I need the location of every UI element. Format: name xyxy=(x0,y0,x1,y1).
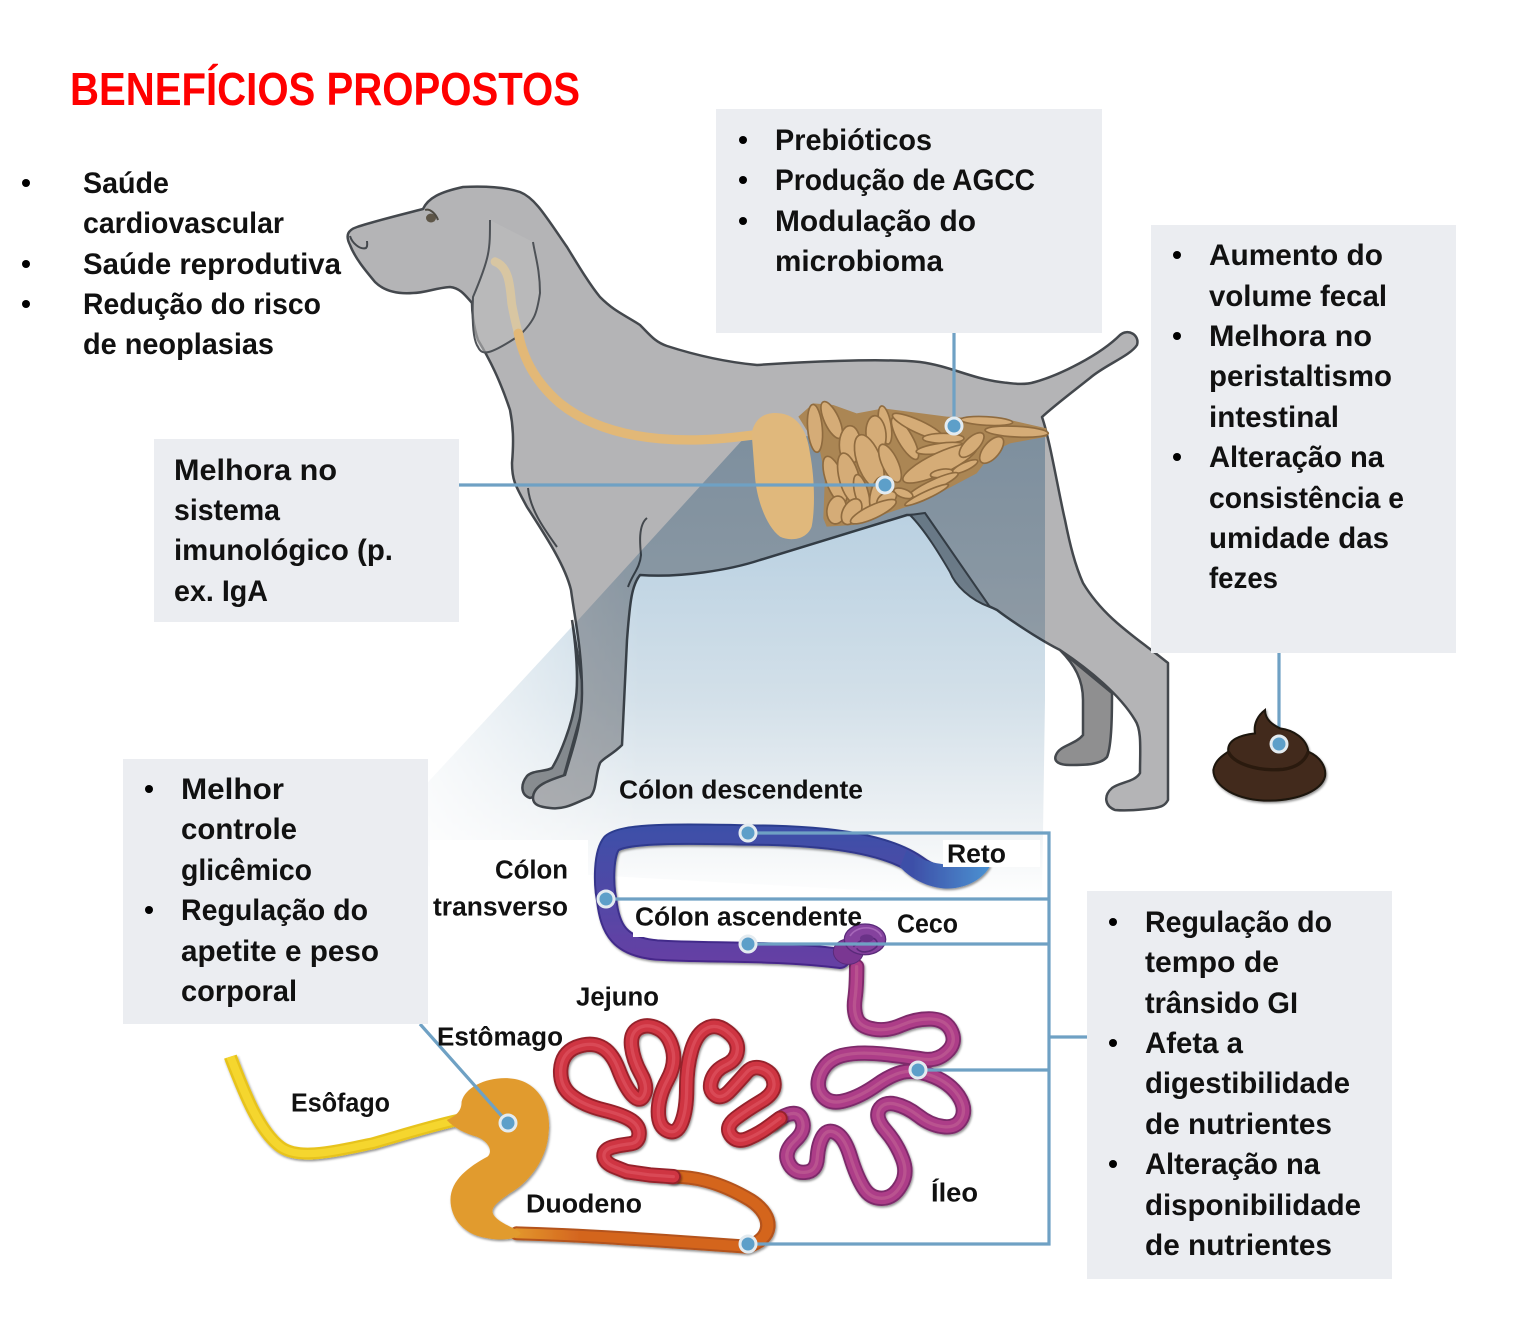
panel: immune system: ex. IgA xyxy=(174,575,268,608)
panel: GI transit: tempo de xyxy=(1145,946,1279,979)
anatomy labels: Ceco xyxy=(897,910,958,938)
panel: fecal effects: Melhora no xyxy=(1209,320,1372,353)
far hind leg xyxy=(1055,650,1112,765)
anatomy labels: Estômago xyxy=(437,1024,563,1052)
panel: GI transit: Regulação do xyxy=(1145,906,1332,939)
nose and mouth xyxy=(350,236,367,248)
panel: GI transit xyxy=(1087,891,1392,1279)
inner flank xyxy=(910,513,990,607)
text block: systemic benefits: Redução do risco xyxy=(83,288,321,321)
panel: glycemic control: controle xyxy=(181,813,297,846)
ear xyxy=(473,220,540,352)
esophagus in dog xyxy=(495,262,753,440)
panel: glycemic control: glicêmico xyxy=(181,854,312,887)
ileum xyxy=(773,967,963,1198)
anatomy labels: Duodeno xyxy=(526,1190,642,1218)
panel: prebiotics: microbioma xyxy=(775,245,944,278)
panel: prebiotics: Prebióticos xyxy=(775,124,932,157)
panel: fecal effects: peristaltismo xyxy=(1209,360,1392,393)
panel: fecal effects: intestinal xyxy=(1209,401,1339,434)
far front leg xyxy=(522,620,585,798)
stomach xyxy=(447,1078,549,1240)
gut mass xyxy=(798,399,1049,528)
cecum xyxy=(833,924,886,964)
panel: prebiotics: Produção de AGCC xyxy=(775,164,1035,197)
panel: glycemic control: Regulação do xyxy=(181,894,368,927)
panel: immune system: Melhora no xyxy=(174,454,337,487)
panel: fecal effects: consistência e xyxy=(1209,482,1404,515)
anatomy labels: Reto xyxy=(947,840,1006,868)
panel: fecal effects: umidade das xyxy=(1209,522,1389,555)
anatomy labels: Jejuno xyxy=(576,984,659,1012)
panel: fecal effects: Alteração na xyxy=(1209,441,1385,474)
anatomy labels: Cólon descendente xyxy=(619,776,863,804)
panel: GI transit: disponibilidade xyxy=(1145,1189,1361,1222)
panel: immune system: sistema xyxy=(174,494,281,527)
esophagus xyxy=(230,1057,458,1154)
illustration: dog xyxy=(348,187,1168,810)
anatomy labels: Cólon ascendente xyxy=(635,904,862,932)
colon xyxy=(605,834,991,958)
duodenum xyxy=(517,1177,768,1247)
shaded highlight panel xyxy=(442,436,1045,864)
panel: glycemic control: Melhor xyxy=(181,773,285,806)
connector lines xyxy=(420,333,1279,1244)
text block: systemic benefits: Saúde xyxy=(83,167,169,200)
panel: GI transit: digestibilidade xyxy=(1145,1067,1350,1100)
anatomy labels: Cólon xyxy=(495,856,568,884)
panel: immune system: imunológico (p. xyxy=(174,534,393,567)
panel: GI transit: de nutrientes xyxy=(1145,1229,1332,1262)
panel: GI transit: Afeta a xyxy=(1145,1027,1244,1060)
esophagus and stomach xyxy=(230,1057,768,1247)
digestive tract xyxy=(230,834,991,1247)
dog body xyxy=(348,187,1168,810)
panel: fecal effects xyxy=(1151,225,1456,653)
panel: prebiotics xyxy=(716,109,1102,333)
anatomy labels: transverso xyxy=(433,894,568,922)
jejunum xyxy=(561,1026,780,1177)
intestinal loops xyxy=(806,399,1049,528)
panel: GI transit: Alteração na xyxy=(1145,1148,1321,1181)
icon: feces xyxy=(1213,710,1325,801)
text block: systemic benefits xyxy=(22,167,342,361)
panel: prebiotics: Modulação do xyxy=(775,205,976,238)
panel: GI transit: de nutrientes xyxy=(1145,1108,1332,1141)
panel: glycemic control: corporal xyxy=(181,975,297,1008)
panel: glycemic control xyxy=(123,759,428,1024)
text block: systemic benefits: cardiovascular xyxy=(83,207,284,240)
anatomy labels xyxy=(291,776,1006,1218)
panel: glycemic control: apetite e peso xyxy=(181,935,379,968)
text block: systemic benefits: de neoplasias xyxy=(83,328,274,361)
anatomy labels: Íleo xyxy=(931,1178,978,1208)
panel: GI transit: trânsido GI xyxy=(1145,987,1298,1020)
title: BENEFÍCIOS PROPOSTOS xyxy=(70,63,580,115)
panel: immune system xyxy=(154,439,459,622)
small intestine xyxy=(561,834,991,1198)
eye xyxy=(425,210,438,222)
panel: fecal effects: volume fecal xyxy=(1209,280,1387,313)
panel: fecal effects: Aumento do xyxy=(1209,239,1383,272)
stomach in dog xyxy=(752,413,814,539)
anatomy labels: Esôfago xyxy=(291,1090,390,1118)
dog intestines xyxy=(752,399,1049,539)
panel: fecal effects: fezes xyxy=(1209,562,1278,595)
chest and elbow lines xyxy=(528,488,647,587)
white label backings xyxy=(430,840,1040,1223)
connector dots xyxy=(500,418,1287,1252)
text block: systemic benefits: Saúde reprodutiva xyxy=(83,248,342,281)
